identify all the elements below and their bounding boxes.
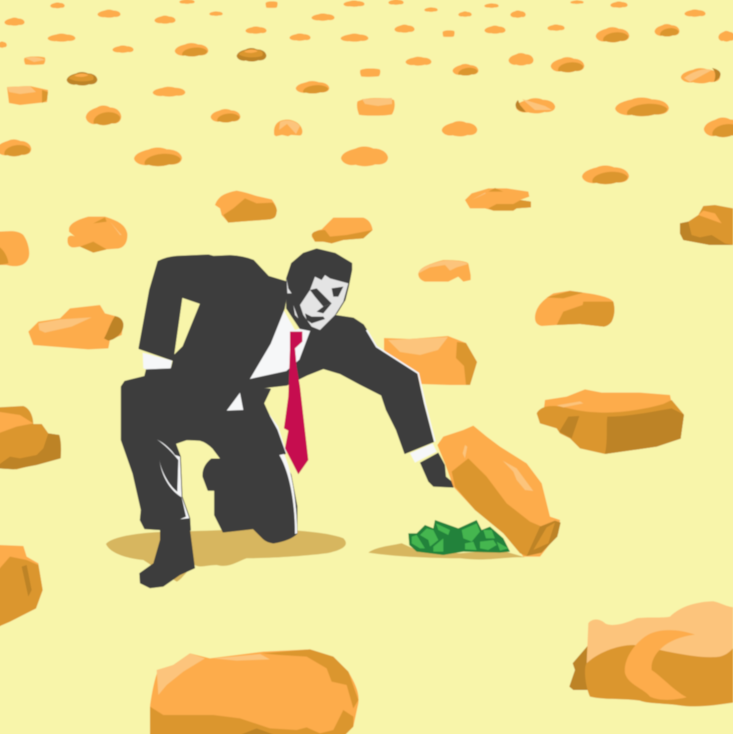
ground shadow under man — [106, 529, 346, 582]
light box rock — [7, 86, 48, 105]
rock: left — [67, 217, 127, 253]
rocks: middle field — [0, 188, 733, 454]
lifted rock body — [437, 426, 560, 557]
rock: behind arm — [384, 336, 477, 385]
shadow under money — [368, 543, 525, 559]
trouser highlights — [157, 439, 189, 519]
rock: left large — [28, 305, 123, 349]
rock being lifted — [437, 426, 561, 557]
rock: centre — [312, 218, 373, 243]
nose — [317, 303, 332, 313]
eyes — [310, 288, 332, 307]
hand — [420, 453, 455, 488]
neck and hair — [287, 249, 352, 331]
mouth — [305, 313, 325, 323]
rock: middle left — [215, 191, 277, 223]
suit: right arm — [248, 315, 433, 453]
right cuff — [410, 443, 437, 463]
left cuff — [143, 353, 172, 369]
sideburn highlight — [293, 305, 298, 318]
rock: bottom right — [569, 601, 733, 706]
trouser shine: thigh edge — [279, 454, 297, 534]
lifted rock dark face — [452, 458, 542, 556]
ear highlight — [287, 278, 292, 293]
shirt: lower fringe — [253, 388, 287, 453]
rock: wide centre right — [465, 188, 531, 211]
rock: right mid — [535, 291, 614, 327]
rock: bottom centre — [150, 649, 359, 734]
boot — [139, 529, 195, 588]
lifted rock end — [527, 521, 561, 556]
rocks: left edge lower — [0, 406, 733, 734]
suit: torso, legs and left arm — [122, 255, 297, 543]
tie — [284, 332, 308, 474]
rock: left mid edge — [0, 406, 61, 469]
rock: highlight flat — [418, 260, 471, 282]
rock: right large — [537, 389, 684, 454]
shirt — [248, 308, 312, 381]
rock: left bottom edge — [0, 545, 43, 627]
face — [300, 275, 348, 330]
man in suit — [122, 249, 455, 588]
lifted rock highlights — [503, 461, 533, 491]
rocks: distant field — [0, 0, 733, 184]
shirt triangle at waist — [227, 393, 243, 411]
money — [408, 520, 510, 555]
rock: right edge dark — [680, 205, 733, 245]
right arm highlight — [367, 330, 435, 442]
rock: left edge — [0, 231, 29, 266]
